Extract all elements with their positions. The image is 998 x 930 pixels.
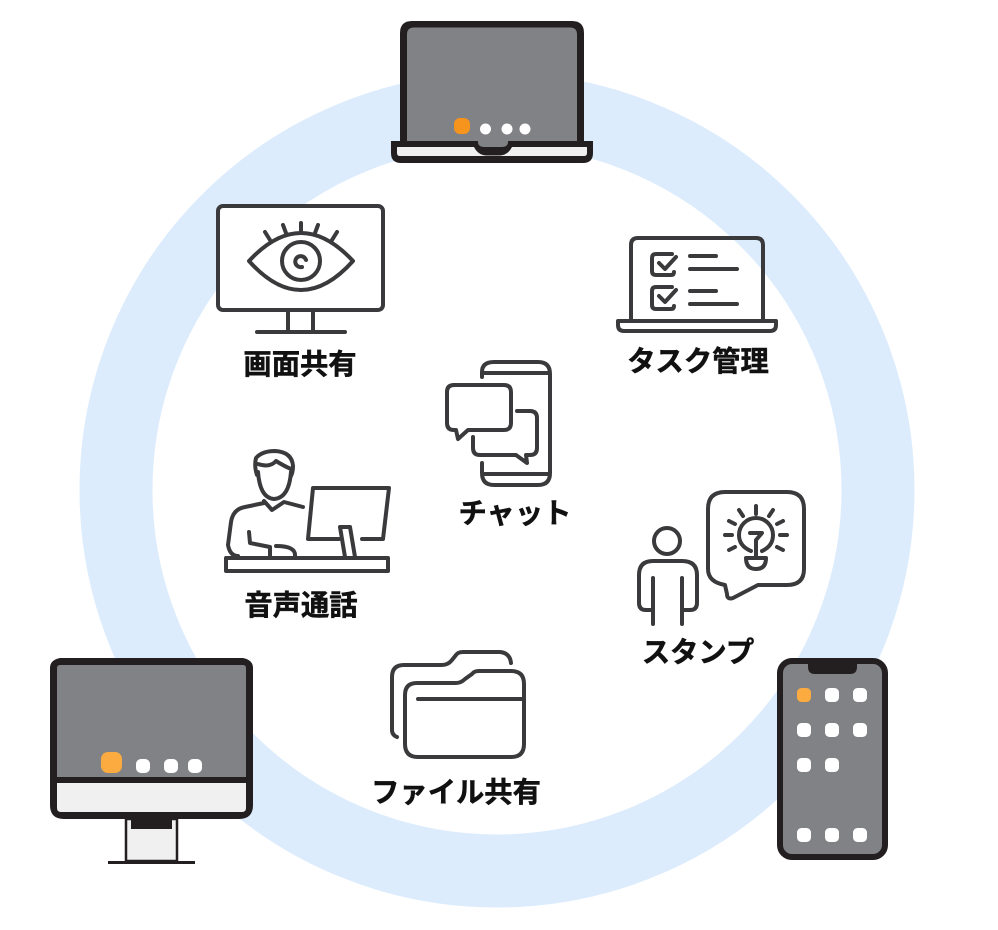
icon: file share folders (392, 652, 524, 757)
label: voice call: 音声通話 (244, 589, 358, 621)
light blue ring (116, 109, 878, 871)
label: stamp: スタンプ (642, 636, 754, 668)
label: screen share: 画面共有 (243, 348, 357, 380)
device: desktop monitor (50, 658, 253, 864)
device: laptop (391, 21, 593, 163)
label: chat: チャット (459, 497, 571, 529)
icon: task management laptop (618, 238, 776, 331)
icon: screen share monitor with eye (218, 206, 383, 332)
icon: chat phone with bubbles (447, 362, 550, 485)
icon: person at desk with computer (226, 451, 389, 571)
label: task management: タスク管理 (627, 345, 769, 377)
device: smartphone (780, 661, 885, 857)
label: file share: ファイル共有 (371, 776, 541, 808)
icon: person with idea speech bubble (639, 492, 804, 624)
